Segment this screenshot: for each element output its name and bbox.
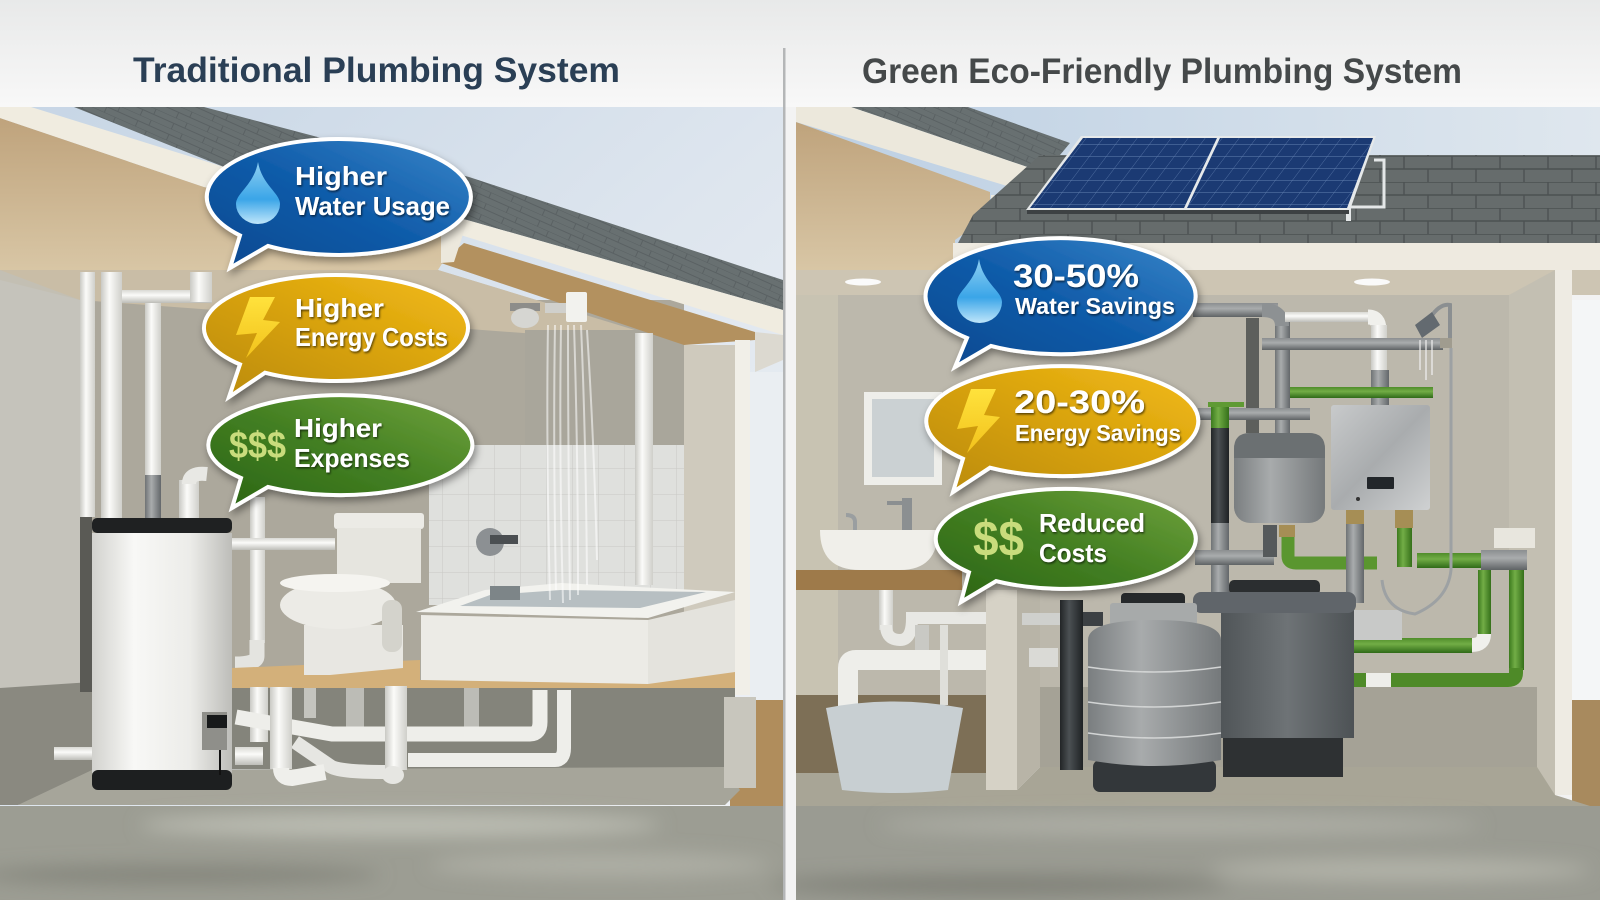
sky bbox=[796, 107, 1600, 247]
callout label: Water Savings bbox=[1015, 293, 1175, 319]
right pier bbox=[724, 697, 756, 788]
heater fittings bbox=[1279, 510, 1413, 537]
concrete foundation bbox=[0, 682, 735, 805]
toilet bbox=[280, 513, 424, 675]
panel: green plumbing scene bbox=[796, 107, 1600, 808]
callout: 20-30% energy savings bbox=[926, 366, 1198, 492]
gray and green piping bbox=[1193, 303, 1535, 687]
lower wall bbox=[796, 687, 1537, 773]
wood flooring right bbox=[730, 700, 783, 806]
house wall and ceiling bbox=[0, 118, 735, 700]
title: green eco-friendly plumbing system: Green Eco-Friendly Plumbing System bbox=[862, 52, 1462, 91]
concrete slab bbox=[18, 767, 740, 805]
icon: lightning bolt bbox=[957, 389, 1000, 453]
gable roof bbox=[796, 107, 1070, 215]
floors bbox=[0, 806, 1600, 900]
water heater bbox=[54, 518, 232, 790]
icon: water drop bbox=[236, 162, 280, 224]
expansion tank bbox=[1234, 433, 1325, 523]
panel: traditional plumbing scene bbox=[0, 107, 783, 807]
shower valve and tub spout bbox=[476, 528, 520, 600]
callout label: Water Usage bbox=[295, 191, 450, 221]
sink drain pipes bbox=[848, 590, 986, 708]
callout figure: 20-30% bbox=[1014, 384, 1145, 420]
ceiling bbox=[796, 270, 1600, 295]
callout: reduced costs bbox=[936, 489, 1196, 602]
main roof shingles bbox=[958, 155, 1600, 243]
roof bbox=[0, 107, 783, 372]
ceiling lights bbox=[845, 278, 1390, 286]
dark rain barrel bbox=[1193, 580, 1356, 777]
floor reflections bbox=[0, 813, 1590, 895]
icon: dollar signs: $$ bbox=[973, 511, 1024, 567]
shower head and hose bbox=[1382, 305, 1452, 614]
callout label: Expenses bbox=[294, 443, 410, 473]
center divider bbox=[783, 48, 796, 900]
callout: higher expenses bbox=[208, 395, 472, 508]
title: traditional plumbing system: Traditional Plumbing System bbox=[133, 51, 620, 90]
fascia bbox=[953, 243, 1600, 270]
slab bbox=[796, 767, 1590, 806]
siding bbox=[796, 122, 990, 270]
callout heading: Higher bbox=[295, 293, 384, 323]
gray storage tank bbox=[1088, 593, 1221, 792]
under-floor drain pipes bbox=[235, 686, 564, 784]
callout label: Energy Costs bbox=[295, 322, 448, 352]
icon: dollar signs: $$$ bbox=[229, 425, 286, 467]
sink and faucet bbox=[820, 498, 938, 570]
counter bbox=[796, 570, 962, 590]
white column bbox=[735, 340, 750, 695]
back and side walls bbox=[796, 270, 1600, 808]
black vertical pipe bbox=[1022, 600, 1103, 770]
white bucket bbox=[826, 702, 963, 793]
icon: water drop bbox=[957, 259, 1002, 323]
callout figure: 30-50% bbox=[1013, 258, 1139, 294]
tiled shower wall bbox=[429, 445, 684, 605]
shower head and water stream bbox=[510, 292, 597, 603]
icon: lightning bolt bbox=[236, 297, 280, 358]
callout: higher water usage bbox=[207, 139, 471, 268]
callout heading: Higher bbox=[294, 413, 382, 443]
bathtub bbox=[416, 583, 735, 684]
callout: higher energy costs bbox=[204, 275, 468, 397]
pillar bbox=[986, 575, 1040, 790]
exterior wall edge bbox=[750, 372, 783, 700]
callout label: Costs bbox=[1039, 538, 1107, 568]
callout heading: Higher bbox=[295, 161, 387, 191]
callout: 30-50% water savings bbox=[926, 238, 1196, 367]
callout label: Energy Savings bbox=[1015, 420, 1181, 446]
mirror bbox=[864, 392, 942, 485]
wood floor deck bbox=[232, 660, 735, 688]
wall pipes bbox=[80, 272, 335, 692]
sky bbox=[0, 107, 783, 807]
shower pipe bbox=[635, 333, 653, 585]
callout heading: Reduced bbox=[1039, 508, 1145, 538]
solar panels bbox=[1026, 136, 1384, 221]
header band bbox=[0, 0, 1600, 107]
tankless water heater bbox=[1331, 405, 1430, 510]
